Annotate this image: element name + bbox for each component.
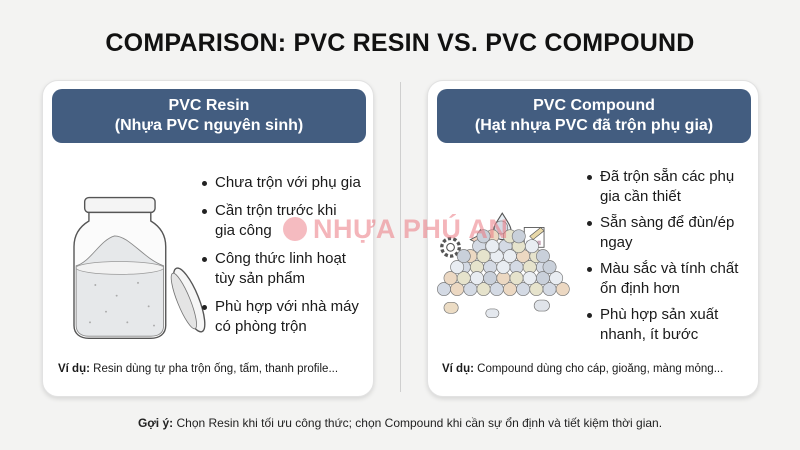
- heading: PVC Compound: PVC Compound: [533, 97, 655, 114]
- bullet list: compound: [587, 168, 738, 343]
- bullet list: compound: Sẵn sàng để đùn/ép ngay: [600, 214, 734, 251]
- bullet list: resin: gia công: [215, 222, 272, 239]
- bullet list: compound: Đã trộn sẵn các phụ gia cần thiết: [600, 168, 734, 205]
- bullet list: compound: Màu sắc và tính chất ổn định hơn: [600, 260, 738, 297]
- panel: PVC Compound: [427, 80, 759, 397]
- heading: PVC Resin: [52, 89, 366, 143]
- icon: jar of powder: [73, 196, 206, 339]
- heading: PVC Resin: (Nhựa PVC nguyên sinh): [115, 117, 303, 134]
- icon: pellet pile: [437, 212, 570, 318]
- bullet list: compound: Phù hợp sản xuất nhanh, ít bước: [600, 306, 718, 343]
- heading: PVC Resin: PVC Resin: [169, 97, 249, 114]
- bullet list: resin: Chưa trộn với phụ gia: [215, 174, 361, 191]
- bullet list: resin: [202, 174, 361, 335]
- heading: PVC Compound: [437, 89, 751, 143]
- heading: PVC Compound: (Hạt nhựa PVC đã trộn phụ gia): [475, 117, 713, 134]
- panel: PVC Resin: [42, 80, 374, 397]
- bullet list: resin: Phù hợp với nhà máy có phòng trộn: [215, 298, 359, 335]
- footer tip: Gợi ý: Chọn Resin khi tối ưu công thức; chọn Compound khi cần sự ổn định và tiết kiệm thời gian.: [138, 416, 662, 430]
- example text: resin: Ví dụ: Resin dùng tự pha trộn ống, tấm, thanh profile...: [58, 363, 338, 375]
- title: COMPARISON: PVC RESIN VS. PVC COMPOUND: [105, 29, 695, 57]
- watermark: NHỰA PHÚ AN: [313, 214, 508, 244]
- example text: compound: Ví dụ: Compound dùng cho cáp, gioăng, màng mỏng...: [442, 363, 723, 375]
- bullet list: resin: Công thức linh hoạt tùy sản phẩm: [215, 250, 346, 287]
- bullet list: resin: Cần trộn trước khi: [215, 202, 337, 219]
